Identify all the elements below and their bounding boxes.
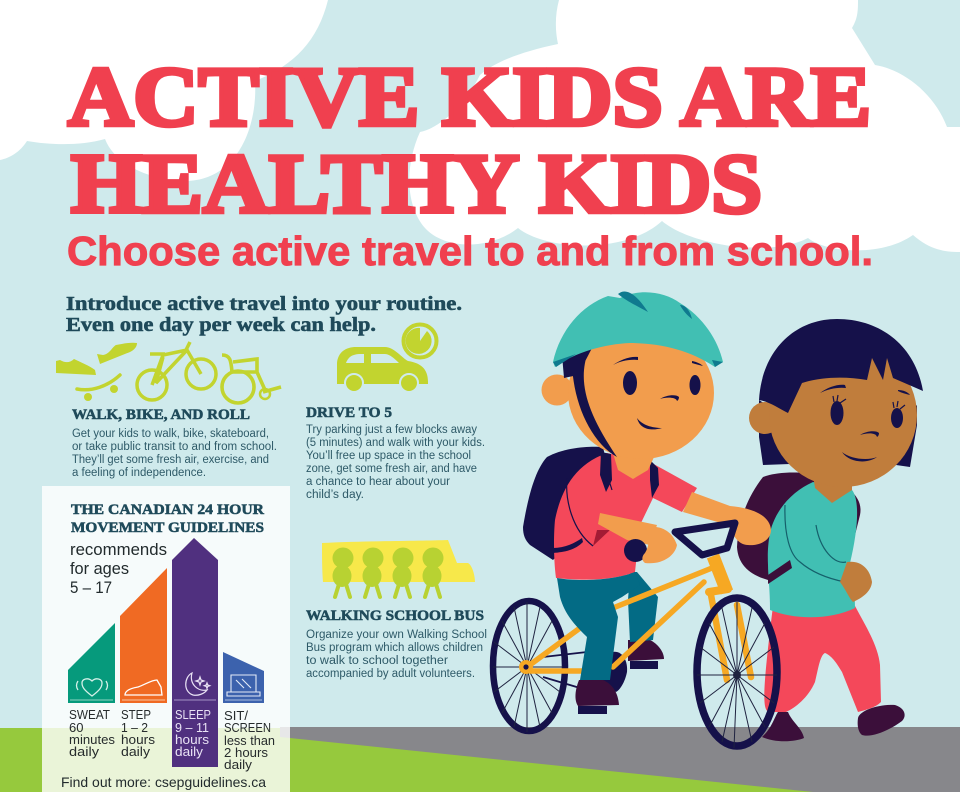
boy head: [568, 327, 714, 459]
sleep label: 9 – 11: [175, 720, 209, 735]
sweat label: daily: [69, 744, 100, 759]
bike frame: [522, 556, 751, 680]
sweat label: 60: [69, 720, 83, 735]
text: drive to 5: Try parking just a few blocks away: [306, 424, 477, 436]
illustration: girl: [737, 319, 923, 741]
step label: hours: [121, 732, 156, 747]
text: walking school bus: Bus program which allows children: [306, 642, 483, 654]
title: ACTIVE KIDS ARE: [68, 50, 871, 144]
step label: [121, 707, 156, 759]
panel subheading: recommends: [70, 540, 167, 559]
intro text: [66, 293, 462, 336]
girl shirt: [768, 482, 857, 617]
text: walking school bus: to walk to school together: [306, 655, 448, 667]
ground: grass: [0, 728, 960, 792]
text: drive to 5: a chance to hear about your: [306, 476, 450, 488]
girl backpack: [737, 472, 840, 580]
bar: sit/screen: [223, 652, 264, 703]
sleep label: SLEEP: [175, 707, 211, 722]
boy neck: [612, 450, 655, 479]
icon: bicycle: [137, 342, 216, 400]
boy hair: [562, 348, 617, 457]
bar: sweat: [68, 623, 115, 703]
sit/screen label: SIT/: [224, 708, 248, 723]
boy back shoe: [628, 640, 664, 669]
panel subheading: [70, 540, 167, 597]
boy ear: [542, 374, 572, 406]
icon: laptop: [227, 675, 260, 696]
text: walking school bus: Organize your own Walking School: [306, 629, 487, 641]
sweat label: SWEAT: [69, 707, 110, 722]
text: walk, bike, and roll: or take public transit to and from school.: [72, 441, 277, 453]
text: drive to 5: You’ll free up space in the school: [306, 450, 471, 462]
step label: STEP: [121, 707, 151, 722]
text: walk, bike, and roll: [72, 428, 277, 479]
girl hair: [759, 319, 923, 413]
front wheel: [697, 598, 777, 748]
boy far leg and crank: [600, 652, 627, 692]
link: Find out more: csepguidelines.ca: [61, 774, 266, 790]
text: walking school bus: [306, 629, 487, 680]
girl neck: [813, 470, 852, 503]
text: walk, bike, and roll: a feeling of independence.: [72, 467, 206, 479]
step label: daily: [121, 744, 151, 759]
boy front shoe: [575, 680, 619, 714]
panel heading: [71, 502, 264, 536]
sit/screen label: daily: [224, 757, 253, 772]
boy face: [613, 357, 703, 429]
sleep label: daily: [175, 744, 204, 759]
heading: walk, bike, and roll: WALK, BIKE, AND ROLL: [72, 407, 250, 423]
title: [68, 50, 871, 231]
chain: [543, 652, 587, 688]
sit/screen label: SCREEN: [224, 720, 271, 735]
girl hair back: [759, 400, 917, 467]
girl head: [769, 343, 917, 487]
title: HEALTHY KIDS: [71, 137, 762, 231]
cloud: top right: [409, 0, 960, 252]
icon: skateboard: [77, 375, 120, 401]
boy straps: [553, 452, 659, 553]
heading: drive to 5: DRIVE TO 5: [306, 405, 392, 421]
icon: car with clock: [337, 324, 436, 392]
girl shoes: [762, 705, 905, 741]
icon: shoes, skateboard, bike, wheelchair: [56, 342, 281, 403]
icon: shoe: [125, 680, 162, 695]
girl ear: [749, 402, 781, 434]
text: walk, bike, and roll: Get your kids to walk, bike, skateboard,: [72, 428, 269, 440]
bar: step: [120, 568, 167, 703]
icon: moon: [186, 673, 210, 695]
boy trousers: [557, 572, 640, 680]
text: drive to 5: (5 minutes) and walk with your kids.: [306, 437, 485, 449]
backpack boy: [523, 447, 615, 560]
heading: walking school bus: WALKING SCHOOL BUS: [306, 608, 484, 624]
sleep label: [175, 707, 211, 759]
icon: wheelchair: [222, 355, 281, 403]
girl face: [820, 385, 910, 461]
subtitle: Choose active travel to and from school.: [67, 228, 873, 274]
sweat label: [69, 707, 115, 759]
text: drive to 5: child’s day.: [306, 489, 364, 501]
boy arms: [598, 492, 771, 545]
panel heading: THE CANADIAN 24 HOUR: [71, 502, 264, 518]
sleep label: hours: [175, 732, 210, 747]
text: walking school bus: accompanied by adult volunteers.: [306, 668, 475, 680]
panel: movement guidelines: [42, 486, 290, 792]
sweat label: minutes: [69, 732, 115, 747]
sit/screen label: [224, 708, 275, 772]
icon: top shoe: [97, 343, 137, 364]
sit/screen label: 2 hours: [224, 745, 268, 760]
step label: 1 – 2: [121, 720, 148, 735]
panel subheading: 5 – 17: [70, 578, 112, 597]
cloud: top left: [0, 0, 328, 181]
bike handlebar: [624, 523, 735, 562]
bar: sleep: [172, 538, 218, 767]
icon: heart: [76, 679, 108, 696]
text: walk, bike, and roll: They’ll get some fresh air, exercise, and: [72, 454, 269, 466]
panel heading: MOVEMENT GUIDELINES: [71, 520, 264, 536]
sit/screen label: less than: [224, 733, 275, 748]
rear wheel: [493, 601, 565, 732]
icon: left shoe: [56, 359, 96, 375]
illustration: boy on bicycle: [493, 291, 777, 748]
intro text: Introduce active travel into your routine.: [66, 293, 462, 315]
girl hand: [840, 562, 872, 602]
intro text: Even one day per week can help.: [66, 314, 376, 336]
panel subheading: for ages: [70, 559, 129, 578]
boy far trouser leg: [628, 572, 658, 642]
ground: road: [280, 727, 960, 792]
boy shirt: [554, 453, 697, 580]
boy helmet: [553, 291, 723, 367]
girl trousers: [764, 606, 881, 712]
text: drive to 5: [306, 424, 485, 501]
text: drive to 5: zone, get some fresh air, and have: [306, 463, 477, 475]
boy near hand: [642, 527, 677, 563]
icon: walking school bus: [322, 540, 475, 597]
